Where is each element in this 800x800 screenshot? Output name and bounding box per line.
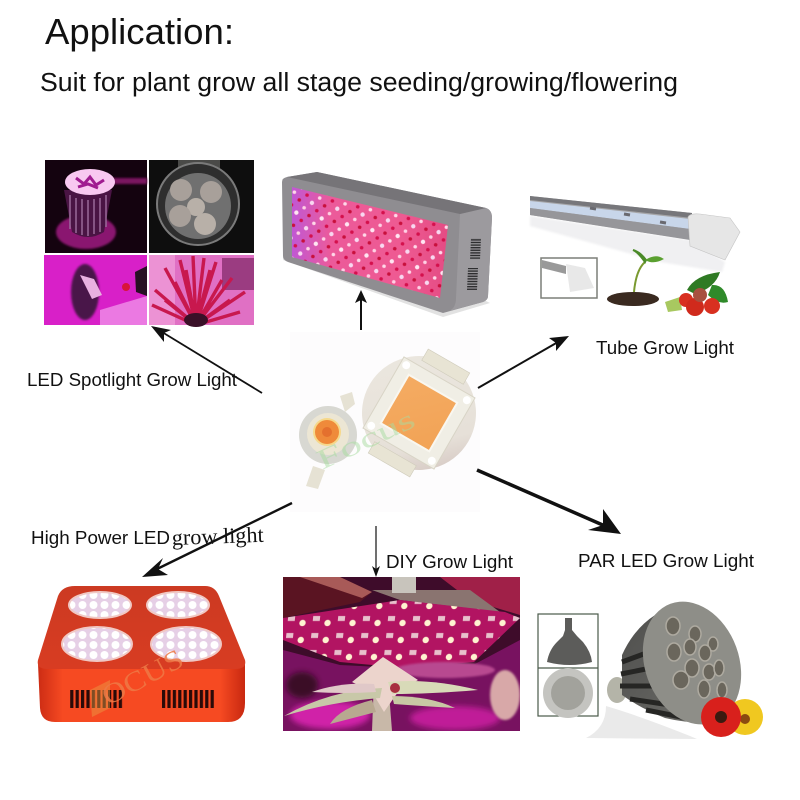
arrow: to spotlight	[151, 326, 262, 393]
tube reflection	[530, 216, 725, 272]
panel: central LED chips	[290, 332, 498, 512]
arrow: to grey panel	[355, 290, 367, 330]
vents	[467, 238, 481, 290]
inset photos	[538, 614, 598, 718]
side face	[449, 208, 492, 311]
label: LED Spotlight Grow Light: LED Spotlight Grow Light	[27, 369, 238, 390]
tile: bulb front view	[149, 160, 254, 253]
watermark	[90, 643, 189, 717]
subtitle: Suit for plant grow all stage seeding/growing/flowering	[40, 69, 678, 97]
inset photo	[541, 258, 597, 298]
LED face	[292, 187, 448, 298]
label: grow light: grow light	[171, 522, 264, 550]
heatsink body	[622, 604, 715, 722]
label: PAR LED Grow Light: PAR LED Grow Light	[578, 550, 755, 571]
vegetables	[665, 272, 728, 316]
panel: tube grow light	[530, 196, 740, 316]
top face	[287, 172, 486, 214]
panel casing	[282, 172, 492, 313]
panel: PAR LED bulb	[538, 588, 763, 739]
cannabis plant	[284, 657, 520, 731]
watermark: OCUS	[97, 643, 189, 712]
arrow: to PAR light	[477, 470, 621, 534]
tube end cap	[688, 214, 740, 260]
background foliage	[283, 640, 520, 731]
small 1W LED	[299, 392, 357, 489]
panel: LED spotlight photo grid	[44, 160, 254, 327]
title: Application:	[45, 11, 234, 52]
high power chip	[340, 333, 498, 493]
flowers	[701, 697, 763, 737]
tile: lit bulb	[45, 160, 147, 253]
arrow: to DIY light	[372, 526, 380, 577]
tube body	[530, 196, 692, 240]
label: High Power LED: High Power LED	[31, 527, 170, 548]
lenses	[62, 592, 221, 661]
LED lenses	[666, 617, 727, 698]
panel: DIY grow light photo	[283, 577, 520, 731]
label: Tube Grow Light: Tube Grow Light	[596, 337, 735, 358]
reflection	[586, 706, 697, 739]
tile: magenta plant	[44, 255, 147, 325]
panel: grey LED panel light	[282, 172, 492, 317]
arrow: to tube light	[478, 336, 569, 388]
arrow: to high power light	[142, 503, 292, 577]
front face	[38, 664, 245, 722]
panel: red high power LED light	[38, 586, 245, 722]
screw base	[607, 677, 627, 703]
light panel	[283, 600, 520, 668]
watermark: Focus	[312, 404, 420, 476]
seedling	[607, 250, 663, 306]
bulb face	[626, 588, 758, 738]
tile: red plant	[149, 255, 254, 327]
vents	[69, 690, 216, 708]
label: DIY Grow Light: DIY Grow Light	[386, 551, 514, 572]
top face	[38, 586, 245, 669]
